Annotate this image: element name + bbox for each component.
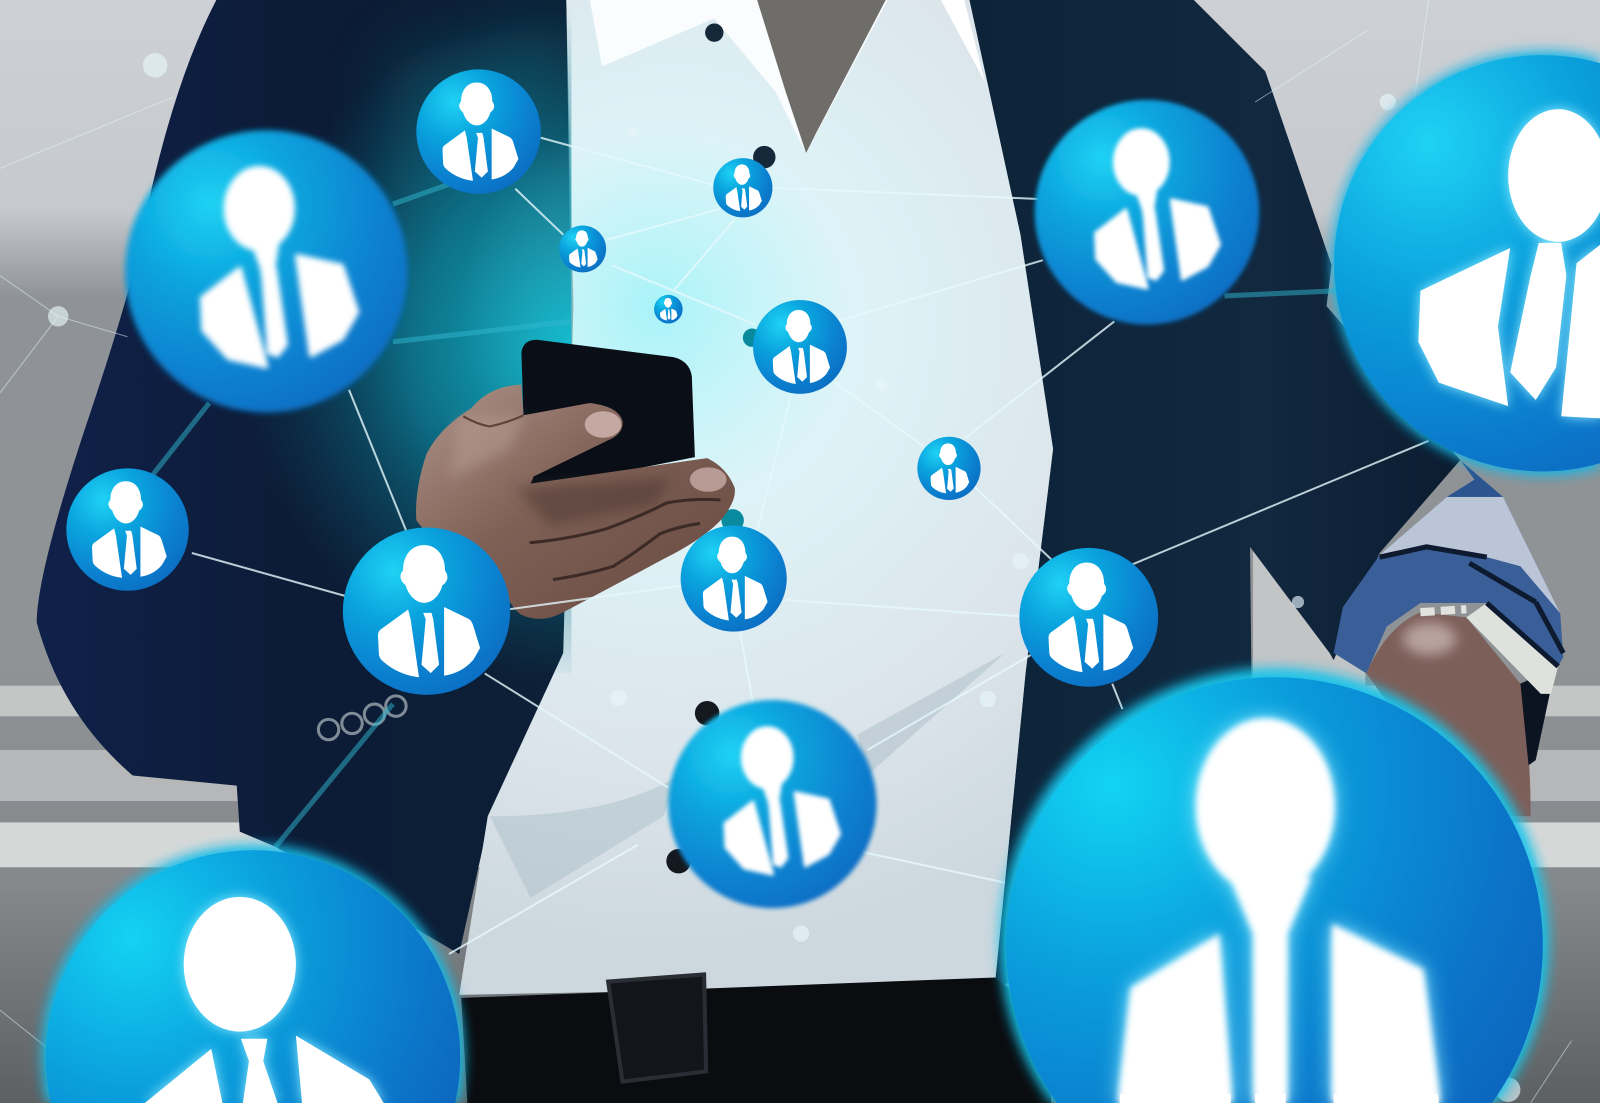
node: small person near top (713, 158, 772, 217)
node: small person left (559, 225, 606, 272)
node: right person (1019, 548, 1158, 687)
jacket: dark navy suit (37, 0, 1460, 985)
node: large blurred right person (1332, 51, 1600, 475)
shirt buttons (666, 23, 776, 873)
rolled sleeve (1334, 460, 1563, 673)
node: middle person (681, 525, 787, 632)
node: centre person (753, 300, 847, 394)
teal glow on jacket (245, 10, 571, 673)
node: lower centre person (668, 700, 877, 908)
trousers and belt (461, 974, 1051, 1103)
jacket sleeve buttons (318, 696, 406, 740)
shirt: white with cyan glow (459, 0, 1053, 995)
node: large blurred lower right person (1000, 668, 1549, 1103)
node: lower left person (343, 528, 510, 695)
phone (521, 340, 695, 490)
node: large blurred lower left person (42, 845, 464, 1103)
node: upper left large person (125, 130, 408, 413)
node: small right person (917, 437, 981, 500)
node: tiny person (654, 295, 683, 323)
node: upper right person (1035, 100, 1259, 325)
hand holding phone (416, 385, 735, 619)
node: far left person (66, 468, 189, 591)
node: top person (416, 69, 541, 194)
forearm and wristwatch (1366, 603, 1558, 816)
